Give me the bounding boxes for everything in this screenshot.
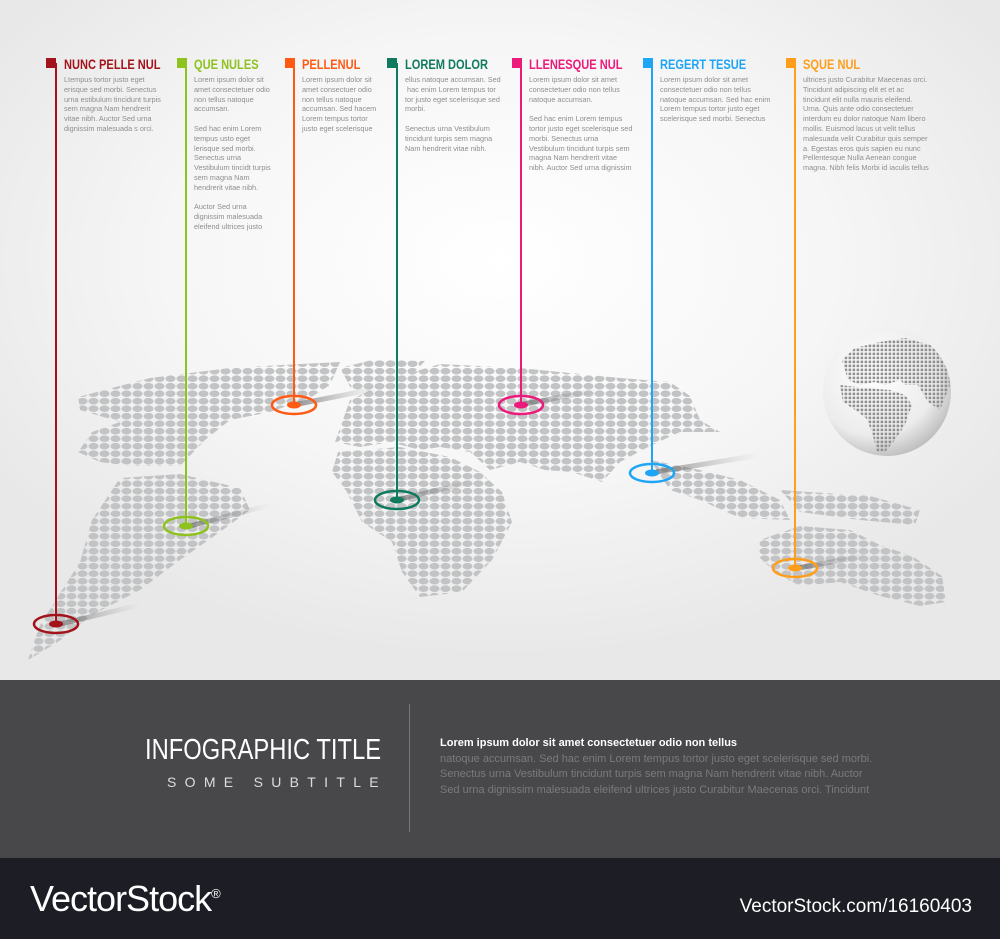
column 7: SQUE NUL: [803, 57, 860, 72]
column 7: malesuada velit Curabitur quis semper: [803, 134, 928, 143]
column 7: Urna. Quis ante odio consectetuer: [803, 104, 914, 113]
title: INFOGRAPHIC TITLE: [145, 734, 381, 766]
column 4: ellus natoque accumsan. Sed: [405, 75, 501, 84]
column 4: tor justo eget scelerisque sed: [405, 95, 500, 104]
column 7: Tincidunt adipiscing elit et et ac: [803, 85, 904, 94]
column 7: interdum eu dolor natoque Nam libero: [803, 114, 926, 123]
column 2: amet consectetuer odio: [194, 85, 270, 94]
column 5: LLENESQUE NUL: [529, 57, 622, 72]
column 6: [643, 57, 770, 123]
column 2: non tellus natoque: [194, 95, 254, 104]
column 4: morbi.: [405, 104, 425, 113]
column 4: LOREM DOLOR: [405, 57, 488, 72]
column 2: Senectus urna: [194, 153, 241, 162]
column 5: Vestibulum tincidunt turpis sem: [529, 144, 630, 153]
watermark band: VectorStock.com/16160403: [740, 896, 972, 917]
column 5: nibh. Auctor Sed urna dignissim: [529, 163, 632, 172]
column 7: ultrices justo Curabitur Maecenas orci.: [803, 75, 927, 84]
column 2: dignissim malesuada: [194, 212, 262, 221]
column 7: mollis. Euismod lacus ut velit tellus: [803, 124, 915, 133]
column 7: a. Egestas eros quis sapien eu nunc: [803, 144, 921, 153]
column 3: Lorem ipsum dolor sit: [302, 75, 372, 84]
description: Lorem ipsum dolor sit amet consectetuer odio non tellus: [440, 737, 737, 749]
description: natoque accumsan. Sed hac enim Lorem tempus tortor justo eget scelerisque sed morbi.: [440, 752, 872, 764]
column 6: consectetuer odio non tellus: [660, 85, 751, 94]
column 1: sem magna Nam hendrerit: [64, 104, 150, 113]
column 7: Pellentesque Nulla Aenean congue: [803, 153, 917, 162]
description: Sed urna dignissim malesuada eleifend ultrices justo Curabitur Maecenas orci. Tincidunt: [440, 784, 869, 796]
column 2: [177, 57, 271, 231]
column 1: dignissim malesuada s orci.: [64, 124, 154, 133]
column 6: scelerisque sed morbi. Senectus: [660, 114, 765, 123]
column 2: tempus usto eget: [194, 134, 250, 143]
pins: [34, 63, 817, 633]
footer panel: [0, 680, 1000, 858]
column 2: Lorem ipsum dolor sit: [194, 75, 264, 84]
column 4: Senectus urna Vestibulum: [405, 124, 490, 133]
column 4: hac enim Lorem tempus tor: [407, 85, 496, 94]
globe: [829, 338, 951, 456]
column 4: tincidunt turpis sem magna: [405, 134, 492, 143]
column 2: Sed hac enim Lorem: [194, 124, 261, 133]
column 5: Sed hac enim Lorem tempus: [529, 114, 622, 123]
column 5: tortor justo eget scelerisque sed: [529, 124, 632, 133]
column 1: vitae nibh. Auctor Sed urna: [64, 114, 152, 123]
column 5: magna Nam hendrerit vitae: [529, 153, 617, 162]
column 4: [387, 57, 501, 153]
description: Senectus urna Vestibulum tincidunt turpis sem magna Nam hendrerit vitae nibh. Auctor: [440, 768, 863, 780]
subtitle: SOME SUBTITLE: [167, 774, 387, 790]
column 2: Vestibulum tincidt turpis: [194, 163, 271, 172]
column 2: QUE NULES: [194, 57, 259, 72]
column 5: morbi. Senectus urna: [529, 134, 598, 143]
column 6: Lorem ipsum dolor sit amet: [660, 75, 748, 84]
column 2: sem magna Nam: [194, 173, 250, 182]
column 7: magna. Nibh felis Morbi id iaculis tellus: [803, 163, 929, 172]
watermark band: VectorStock®: [30, 878, 220, 919]
column 3: PELLENUL: [302, 57, 360, 72]
column 2: Auctor Sed urna: [194, 202, 247, 211]
map: continents: [28, 360, 946, 660]
column 7: tincidunt elit nulla mauris eleifend.: [803, 95, 913, 104]
world map with pins: [28, 63, 951, 660]
column 3: amet consectuer odio: [302, 85, 372, 94]
column 6: Lorem tempus tortor justo eget: [660, 104, 759, 113]
pin shadows: [60, 388, 870, 624]
watermark band: [0, 858, 1000, 939]
column 3: Lorem tempus tortor: [302, 114, 368, 123]
column 7: [786, 57, 929, 172]
column 2: accumsan.: [194, 104, 229, 113]
column 2: eleifend ultrices justo: [194, 222, 262, 231]
column 4: Nam hendrerit vitae nibh.: [405, 144, 487, 153]
column 3: justo eget scelerisque: [302, 124, 373, 133]
column 3: non tellus natoque: [302, 95, 362, 104]
description: [440, 737, 872, 796]
column 6: natoque accumsan. Sed hac enim: [660, 95, 770, 104]
column 2: lerisque sed morbi.: [194, 144, 256, 153]
column 1: Ltempus tortor justo eget: [64, 75, 145, 84]
column 5: [512, 57, 632, 172]
column 3: accumsan. Sed hacem: [302, 104, 376, 113]
column 1: [46, 57, 161, 133]
column 1: erisque sed morbi. Senectus: [64, 85, 156, 94]
column 5: natoque accumsan.: [529, 95, 593, 104]
column 1: NUNC PELLE NUL: [64, 57, 161, 72]
column 5: Lorem ipsum dolor sit amet: [529, 75, 617, 84]
column 2: hendrerit vitae nibh.: [194, 183, 258, 192]
column 3: [285, 57, 376, 133]
column 1: urna estibulum tincidunt turpis: [64, 95, 161, 104]
column 5: consectetuer odio non tellus: [529, 85, 620, 94]
column 6: REGERT TESUE: [660, 57, 746, 72]
